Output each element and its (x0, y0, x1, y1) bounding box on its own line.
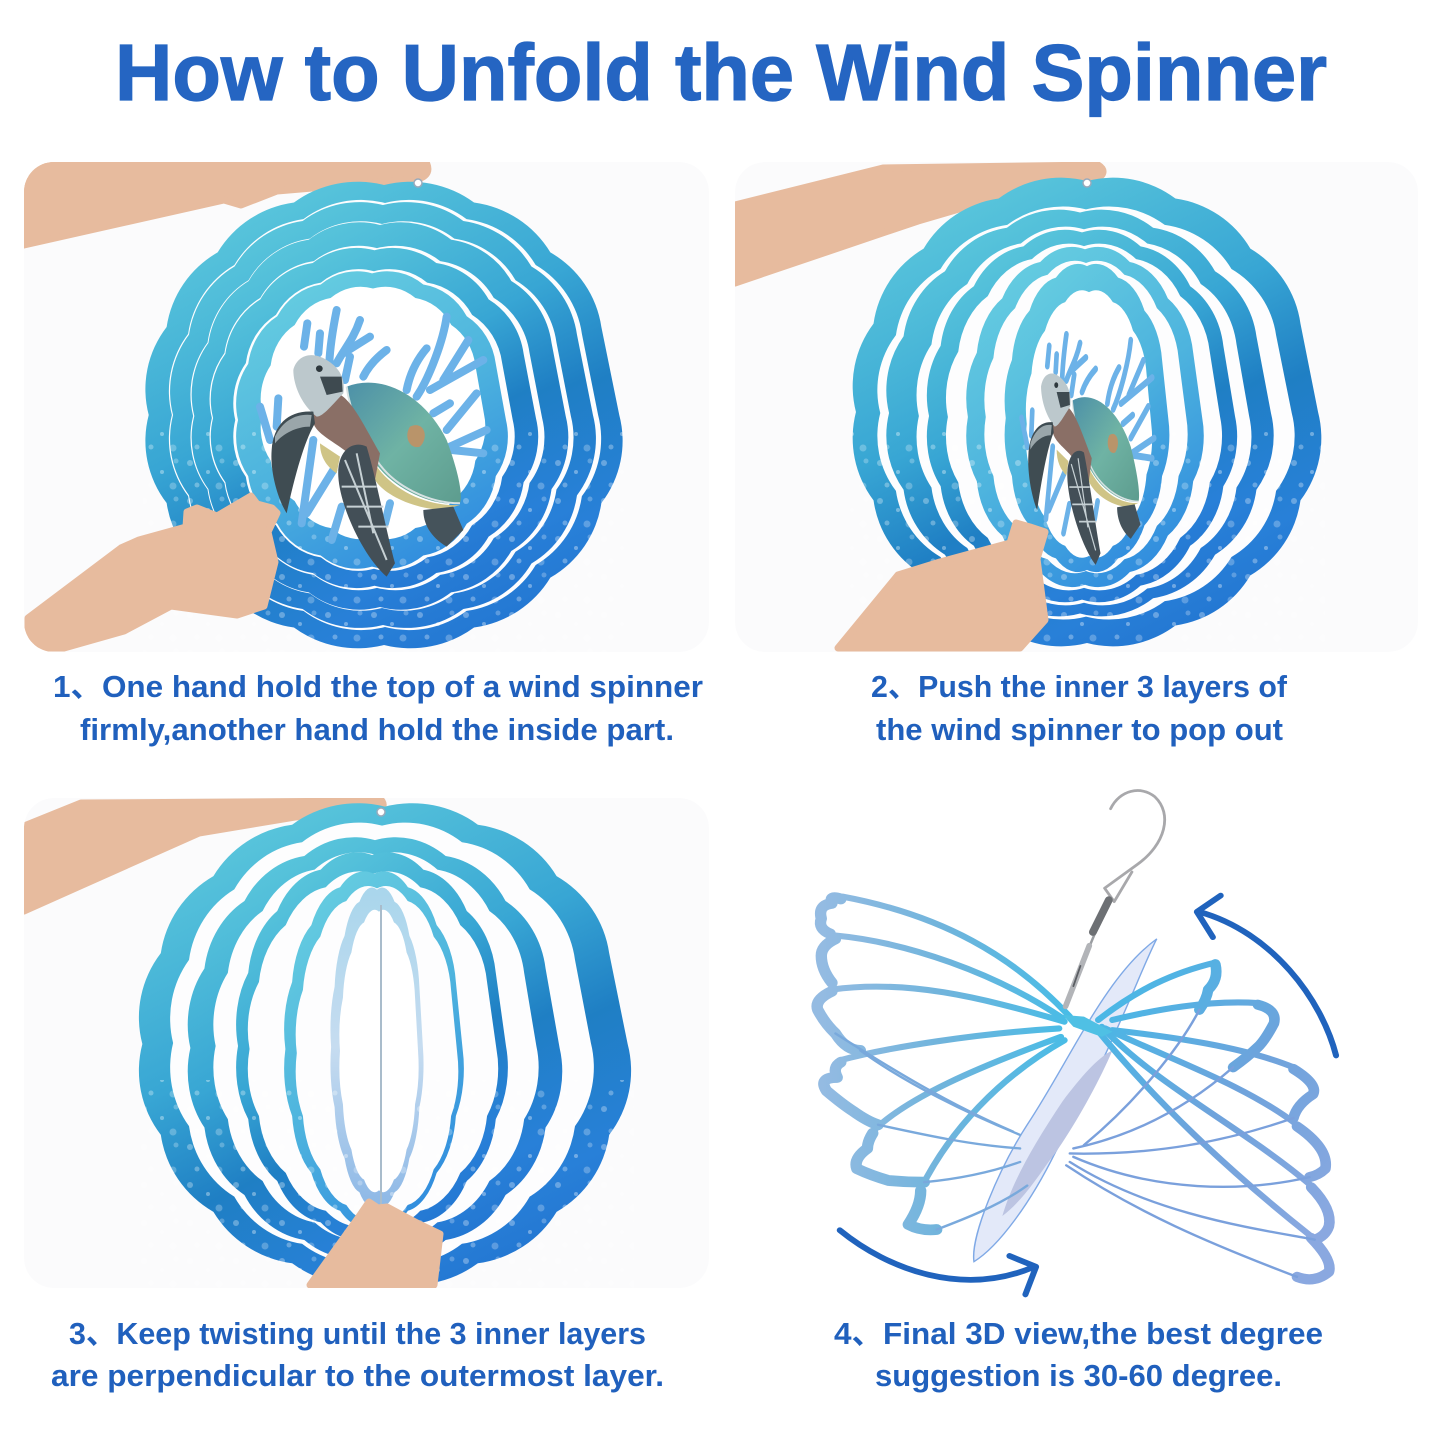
panel: step 4 final 3D view (817, 791, 1336, 1294)
panel: step 1 photo (24, 162, 623, 652)
caption: step 2: 2、Push the inner 3 layers of (871, 669, 1288, 704)
caption: step 3: 3、Keep twisting until the 3 inner layers (69, 1316, 646, 1351)
icon: centre layer seen edge-on (974, 939, 1157, 1262)
icon: wind spinner with perpendicular layers (137, 803, 634, 1288)
icon: arm holding top (24, 801, 383, 911)
caption: step 3 (51, 1316, 664, 1393)
caption: step 2: the wind spinner to pop out (876, 712, 1283, 747)
arrow: rotate lower (840, 1230, 1036, 1294)
caption: step 2 (871, 669, 1288, 747)
icon: hub (1063, 1015, 1112, 1037)
caption: step 4 (834, 1316, 1323, 1393)
icon: arm holding top (24, 162, 428, 245)
caption: step 1: firmly,another hand hold the inside part. (80, 712, 674, 747)
caption: step 4: suggestion is 30-60 degree. (875, 1358, 1282, 1393)
icon: wind spinner with turtle, folded (143, 179, 625, 652)
arrow: rotate upper (1197, 896, 1336, 1055)
icon: right wing loops (1066, 963, 1329, 1279)
icon: hook and swivel (1064, 791, 1165, 1006)
icon: hand pushing inner layers (838, 523, 1045, 648)
panel: step 2 photo (735, 162, 1322, 652)
title: How to Unfold the Wind Spinner (115, 28, 1327, 117)
icon: arm holding top (735, 165, 1103, 283)
caption: step 3: are perpendicular to the outermost layer. (51, 1358, 664, 1393)
caption: step 1 (53, 669, 703, 747)
panel: step 3 photo (24, 798, 632, 1288)
icon: wind spinner inner layers popping out (850, 178, 1325, 650)
icon: hand holding inside (28, 496, 277, 648)
icon: left wing loops (817, 897, 1070, 1230)
icon: hand twisting inner layers (310, 1202, 440, 1285)
caption: step 4: 4、Final 3D view,the best degree (834, 1316, 1323, 1351)
caption: step 1: 1、One hand hold the top of a wind spinner (53, 669, 703, 704)
